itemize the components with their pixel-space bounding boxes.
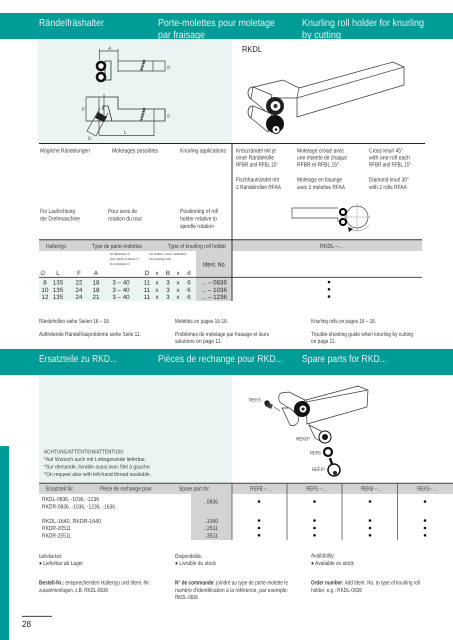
notes German: Rändelrollen siehe Seiten 16 – 18.: [39, 318, 110, 325]
table rows: 135: [53, 294, 64, 301]
availability dots: [328, 281, 330, 298]
table rows: x: [176, 280, 180, 286]
spare table headers: Pièce de rechange pour: [100, 486, 152, 492]
spare table models: RKDR-25511: [42, 532, 72, 539]
table sub-header notes: für Werkstück ∅: [110, 252, 130, 256]
side view schematic: L: [124, 130, 127, 136]
lathe rotation labels: Für Laufrichtung: [40, 208, 75, 215]
table header labels: [46, 243, 343, 250]
table rows: x: [176, 294, 180, 301]
table rows: 135: [53, 287, 64, 294]
order note English: Order number: Add Ident. No. to type of knurling roll: [311, 580, 420, 586]
order note French: N° de commande: joindre au type de porte-molette le: [175, 580, 289, 586]
spare table headers: REFS – ...: [306, 486, 327, 492]
column headings: x: [155, 270, 159, 277]
knurl types German: Fischhauträndel mit: [236, 176, 279, 184]
lathe rotation labels: der Drehmaschine: [40, 216, 81, 222]
availability German: ● Lieferbar ab Lager: [39, 560, 83, 567]
availability French: [175, 553, 217, 567]
table rows: x: [155, 280, 159, 286]
knurl types French: [297, 148, 348, 191]
table rows: 3 – 40: [112, 280, 130, 286]
spare table ident numbers: ..3511: [204, 532, 219, 539]
knurling applications labels: [40, 148, 226, 154]
table rows: ... – 1236: [201, 294, 227, 301]
table rows: 12: [42, 294, 49, 301]
spare table models: RKDL-1640, RKDR-1640: [42, 518, 102, 525]
order note German: Bestell-Nr.: entsprechenden Haltertyp und Ident.-Nr.: [39, 580, 150, 586]
table rows: ... – 0836: [201, 280, 227, 286]
knurl types French: avec 2 molettes RFAA: [297, 184, 345, 191]
spare table models: [42, 496, 116, 539]
table rows: x: [155, 287, 159, 294]
spare table ident numbers: ..2511: [204, 525, 219, 532]
table rows: [42, 280, 227, 301]
illustration: RKDL holder: [248, 62, 404, 134]
knurling applications labels: Knurling applications: [180, 148, 226, 154]
column headings: A: [94, 270, 99, 277]
table rows: ... – 1036: [201, 287, 227, 294]
spare table headers: Ersatzteil für: [46, 486, 73, 492]
panel: attention note: [39, 375, 232, 483]
notes German: [39, 318, 141, 338]
illustration: spare parts exploded view: [249, 386, 368, 476]
table rows: 11: [144, 287, 151, 294]
notes French: [175, 318, 269, 345]
divider between columns: [231, 143, 233, 301]
lathe rotation labels: holder relative to: [180, 216, 218, 222]
notes French: solutions on page 11.: [175, 338, 222, 345]
table header labels: RKDL –...: [320, 243, 343, 250]
table rows: 3 – 40: [112, 294, 130, 301]
order note French: [175, 580, 289, 601]
availability English: Availability:: [311, 552, 335, 560]
availability German: [39, 553, 83, 567]
availability French: ● Livrable du stock: [175, 560, 217, 567]
table rows: 3: [166, 294, 170, 301]
table header labels: Haltertyp: [46, 243, 67, 250]
lathe rotation labels: Pour sens de: [108, 208, 138, 215]
notes German: Auftretende Rändelfräsprobleme siehe Seite 11.: [39, 331, 141, 338]
left edge strip: [0, 446, 9, 640]
notes English: [311, 318, 413, 345]
knurl types German: RFBR and RFBL 15°: [236, 162, 278, 168]
spare table ident numbers: ..0836: [204, 499, 219, 506]
order note English: holder, e.g.: RKDL-0836: [311, 587, 363, 594]
table rows: 6: [187, 280, 191, 286]
part labels: REKS: [249, 398, 262, 404]
table sub-header notes: für Rollen / pour molettes /: [149, 252, 187, 256]
panel: attention note: *Auf Wunsch auch mit Linksgewinde lieferbar.: [44, 456, 146, 463]
side view schematic: ∅: [166, 114, 170, 118]
column headings: x: [176, 270, 180, 277]
lathe rotation labels: Positioning of roll: [180, 208, 218, 215]
header band: spare parts: [0, 349, 453, 375]
header band: spare parts: Ersatzteile zu RKD...: [39, 354, 117, 365]
column headings: [40, 270, 191, 277]
table: holder dimensions: [39, 240, 422, 301]
spare table models: RKDR-0836, -1036, -1236, -1636: [42, 504, 116, 510]
knurl types English: RFBR and RFBL 15°: [369, 162, 411, 168]
table sub-header notes: for knurling rolls: [149, 257, 171, 261]
order note French: numéro d'identification à la référence, par exemple:: [175, 587, 288, 594]
side view schematic: [82, 94, 170, 142]
table rows: 3: [166, 287, 170, 294]
ident number heading: Ident. No.: [203, 262, 226, 268]
header band: knurling roll holder: par fraisage: [158, 30, 205, 41]
top view schematic: [97, 46, 170, 81]
table rows: 6: [187, 294, 191, 301]
notes English: Knurling rolls on pages 16 – 18.: [311, 318, 376, 325]
table header labels: Type de parte-molettes: [92, 243, 142, 250]
header band: knurling roll holder: by cutting: [302, 30, 341, 41]
page number: 28: [22, 619, 31, 629]
table header labels: Type of knurling roll holder: [168, 243, 226, 250]
table rows: 3: [166, 280, 170, 286]
spare table dots: [258, 500, 426, 537]
knurl types German: Kreuzrändel mit je: [236, 148, 277, 154]
availability French: Disponibilità:: [175, 553, 202, 560]
rule under drawing: [39, 142, 425, 144]
table rows: 18: [93, 280, 100, 286]
knurl types English: with one roll each: [368, 154, 410, 162]
panel: attention note: *On request also with left-hand thread available.: [44, 471, 151, 478]
spare table headers: Spare part for: [179, 486, 209, 492]
notes French: Molettes on pages 16-18.: [175, 318, 228, 325]
spare table ident numbers: ..1040: [204, 518, 219, 525]
header band: knurling roll holder: Porte-molettes pour moletage: [158, 18, 275, 29]
table rows: 21: [93, 294, 100, 301]
header band: spare parts: Pièces de rechange pour RKD...: [158, 354, 283, 365]
order note French: RKDL-0836: [175, 594, 198, 601]
availability English: [311, 552, 355, 567]
order note German: zusammenfügen, z.B. RKDL-0836: [39, 587, 109, 594]
part labels: REFS*: [312, 467, 325, 473]
column headings: B: [166, 270, 170, 277]
knurl types English: Cross knurl 45°: [369, 148, 403, 154]
table rows: 11: [144, 294, 151, 301]
table sub-header notes: [110, 252, 187, 266]
knurl types German: 2 Rändelrollen RFAA: [236, 184, 281, 191]
table rows: 135: [53, 280, 64, 286]
knurl types French: une molette de chaque: [297, 154, 348, 162]
knurl types English: Diamond knurl 30°: [369, 176, 409, 184]
spare table headers: [46, 486, 437, 492]
order note German: [39, 580, 150, 594]
table rows: 24: [76, 287, 83, 294]
table sub-header notes: pour pièce à usiner ∅: [110, 257, 139, 261]
table rows: 3 – 40: [112, 287, 130, 294]
spare table headers: REKS– ...: [417, 486, 437, 492]
diagram: holder position relative to spindle: [292, 203, 370, 232]
lathe rotation labels: spindle rotation: [180, 223, 214, 230]
part labels: REKB*: [296, 436, 310, 442]
header band: knurling roll holder: Knurling roll holder for knurling: [302, 18, 424, 29]
lathe rotation labels: [40, 208, 218, 230]
top view schematic: ∅: [166, 65, 170, 70]
side view schematic: D: [88, 136, 92, 142]
table sub-header notes: for workpiece ∅: [110, 262, 130, 266]
notes English: on page 11.: [311, 338, 336, 345]
table rows: 24: [76, 294, 83, 301]
product name: RKDL: [242, 44, 262, 54]
lathe rotation labels: rotation du tour: [108, 216, 142, 222]
knurl types German: einer Rändelrolle: [236, 154, 275, 162]
top view schematic: A: [108, 46, 112, 52]
knurling applications labels: Moletages possibles: [112, 148, 158, 154]
column headings: d: [187, 270, 191, 277]
panel: attention note: *Sur demande, livrable aussi avec filet à gauche.: [44, 464, 151, 470]
spare table models: RKDL-0836, -1036, -1236: [42, 496, 100, 503]
table rows: 18: [93, 287, 100, 294]
order note English: [311, 580, 420, 594]
knurl types French: RFBR et RFBL 15°: [297, 162, 339, 168]
table rows: 10: [42, 287, 49, 294]
table rows: 22: [76, 280, 83, 286]
notes French: Problèmes de moletage par fraisage et leurs: [175, 331, 269, 338]
notes English: Trouble-shooting guide when knurling by cutting: [311, 331, 413, 338]
knurl types English: with 2 rolls RFAA: [368, 184, 407, 191]
column headings: ∅: [40, 270, 46, 277]
table rows: 11: [144, 280, 151, 286]
availability German: Lieferbarkeit:: [39, 553, 62, 560]
table: spare parts: [39, 483, 453, 540]
knurl types French: Moletage en losange: [297, 176, 343, 184]
knurl types French: Moletage croisé avec: [297, 148, 344, 154]
spare table headers: REFB – ...: [250, 486, 272, 492]
header band: knurling roll holder: Rändelfräshalter: [39, 18, 105, 29]
table rows: x: [176, 287, 180, 294]
table rows: x: [155, 294, 159, 301]
knurl types German: [236, 148, 281, 191]
table rows: 6: [187, 287, 191, 294]
column headings: D: [145, 270, 150, 277]
header band: spare parts: Spare parts for RKD...: [302, 354, 387, 365]
column headings: L: [56, 270, 60, 277]
table rows: 8: [43, 280, 47, 286]
side view schematic: F: [82, 107, 85, 113]
header band: knurling roll holder: [0, 13, 453, 41]
spare table headers: REKB – ...: [361, 486, 382, 492]
spare table models: RKDR-20511: [42, 525, 72, 532]
knurl types English: [368, 148, 411, 191]
page number: [22, 616, 52, 629]
panel: attention note: ACHTUNG/ATTENTION/ATTENTION:: [44, 448, 124, 456]
spare table ident numbers: [204, 499, 219, 539]
availability English: ● Available ex stock: [311, 560, 355, 567]
part labels: [249, 398, 325, 473]
part labels: REFB: [310, 450, 322, 456]
knurling applications labels: Mögliche Rändelungen: [40, 148, 90, 154]
column headings: F: [77, 270, 81, 277]
panel: technical drawing: [38, 39, 232, 143]
